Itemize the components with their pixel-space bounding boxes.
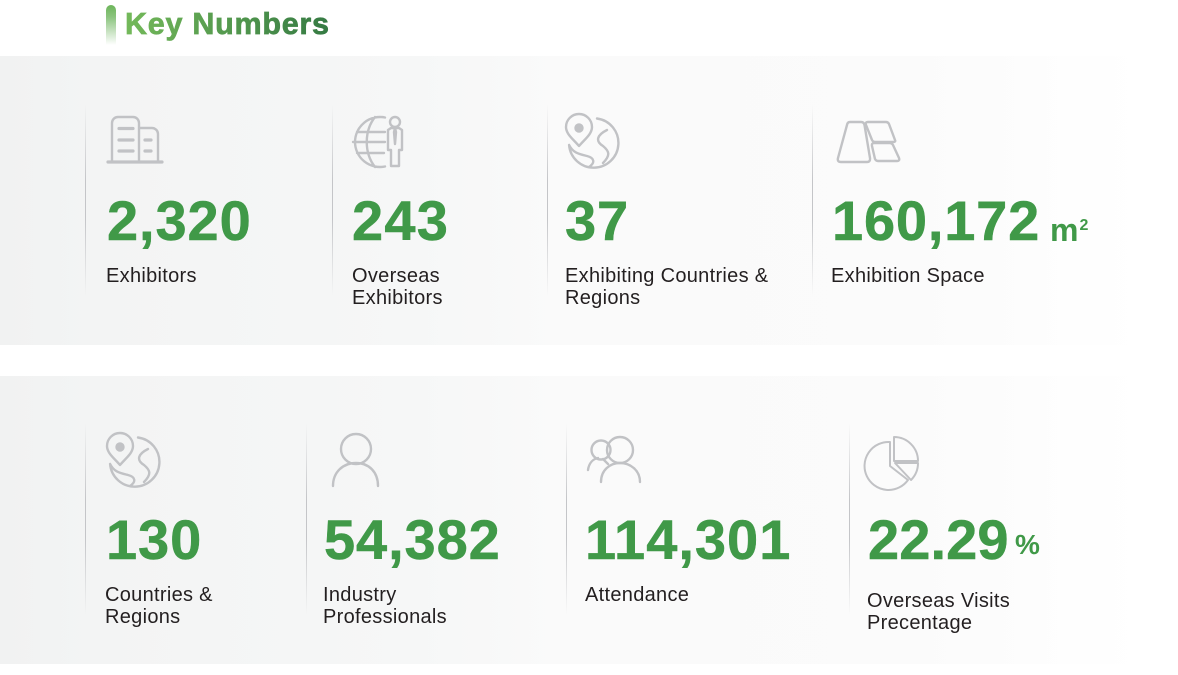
stat: overseas visits percentage	[849, 434, 1040, 634]
label: Precentage	[867, 612, 972, 634]
value: 160,172	[832, 189, 1040, 252]
stat: exhibitors	[85, 116, 252, 287]
label: Industry	[323, 584, 397, 606]
icon: globe with person	[352, 116, 404, 168]
stat: industry professionals	[306, 432, 501, 628]
label: Countries &	[105, 584, 213, 606]
label: Regions	[105, 606, 180, 628]
stat: exhibition space	[812, 116, 1088, 287]
label: Overseas	[352, 265, 440, 287]
icon: buildings	[106, 116, 164, 164]
value: 2,320	[107, 189, 252, 252]
icon: pie chart	[864, 436, 919, 491]
label	[565, 265, 768, 309]
label: Overseas Visits	[867, 590, 1010, 612]
stat: countries and regions	[85, 432, 213, 628]
panel: bottom statistics band	[0, 376, 1178, 664]
value: 243	[352, 189, 449, 252]
label: Professionals	[323, 606, 447, 628]
title text: Key Numbers	[125, 7, 329, 41]
icon: two people	[586, 436, 642, 484]
label: Attendance	[585, 584, 689, 606]
icon: floor plan	[836, 120, 900, 164]
icon: person	[332, 432, 380, 488]
value: 37	[565, 189, 629, 252]
unit: m2	[1050, 212, 1088, 248]
stat: exhibiting countries and regions	[547, 112, 768, 309]
panel: top statistics band	[0, 56, 1178, 345]
value: 114,301	[585, 508, 791, 571]
value: 54,382	[324, 508, 501, 571]
label: Regions	[565, 287, 640, 309]
label: Exhibiting Countries &	[565, 265, 768, 287]
label	[323, 584, 447, 628]
title accent bar	[106, 5, 116, 45]
stat: attendance	[566, 435, 791, 606]
value: 130	[106, 508, 202, 571]
label	[867, 590, 1010, 634]
label: Exhibitors	[352, 287, 443, 309]
label	[352, 265, 443, 309]
label	[105, 584, 213, 628]
value: 22.29	[868, 508, 1009, 571]
title	[106, 5, 329, 43]
icon: map pin and globe	[106, 432, 161, 488]
icon: map pin and globe	[564, 112, 620, 169]
label: Exhibitors	[106, 265, 197, 287]
label: Exhibition Space	[831, 265, 985, 287]
stat: overseas exhibitors	[332, 116, 449, 309]
unit: %	[1015, 529, 1040, 560]
